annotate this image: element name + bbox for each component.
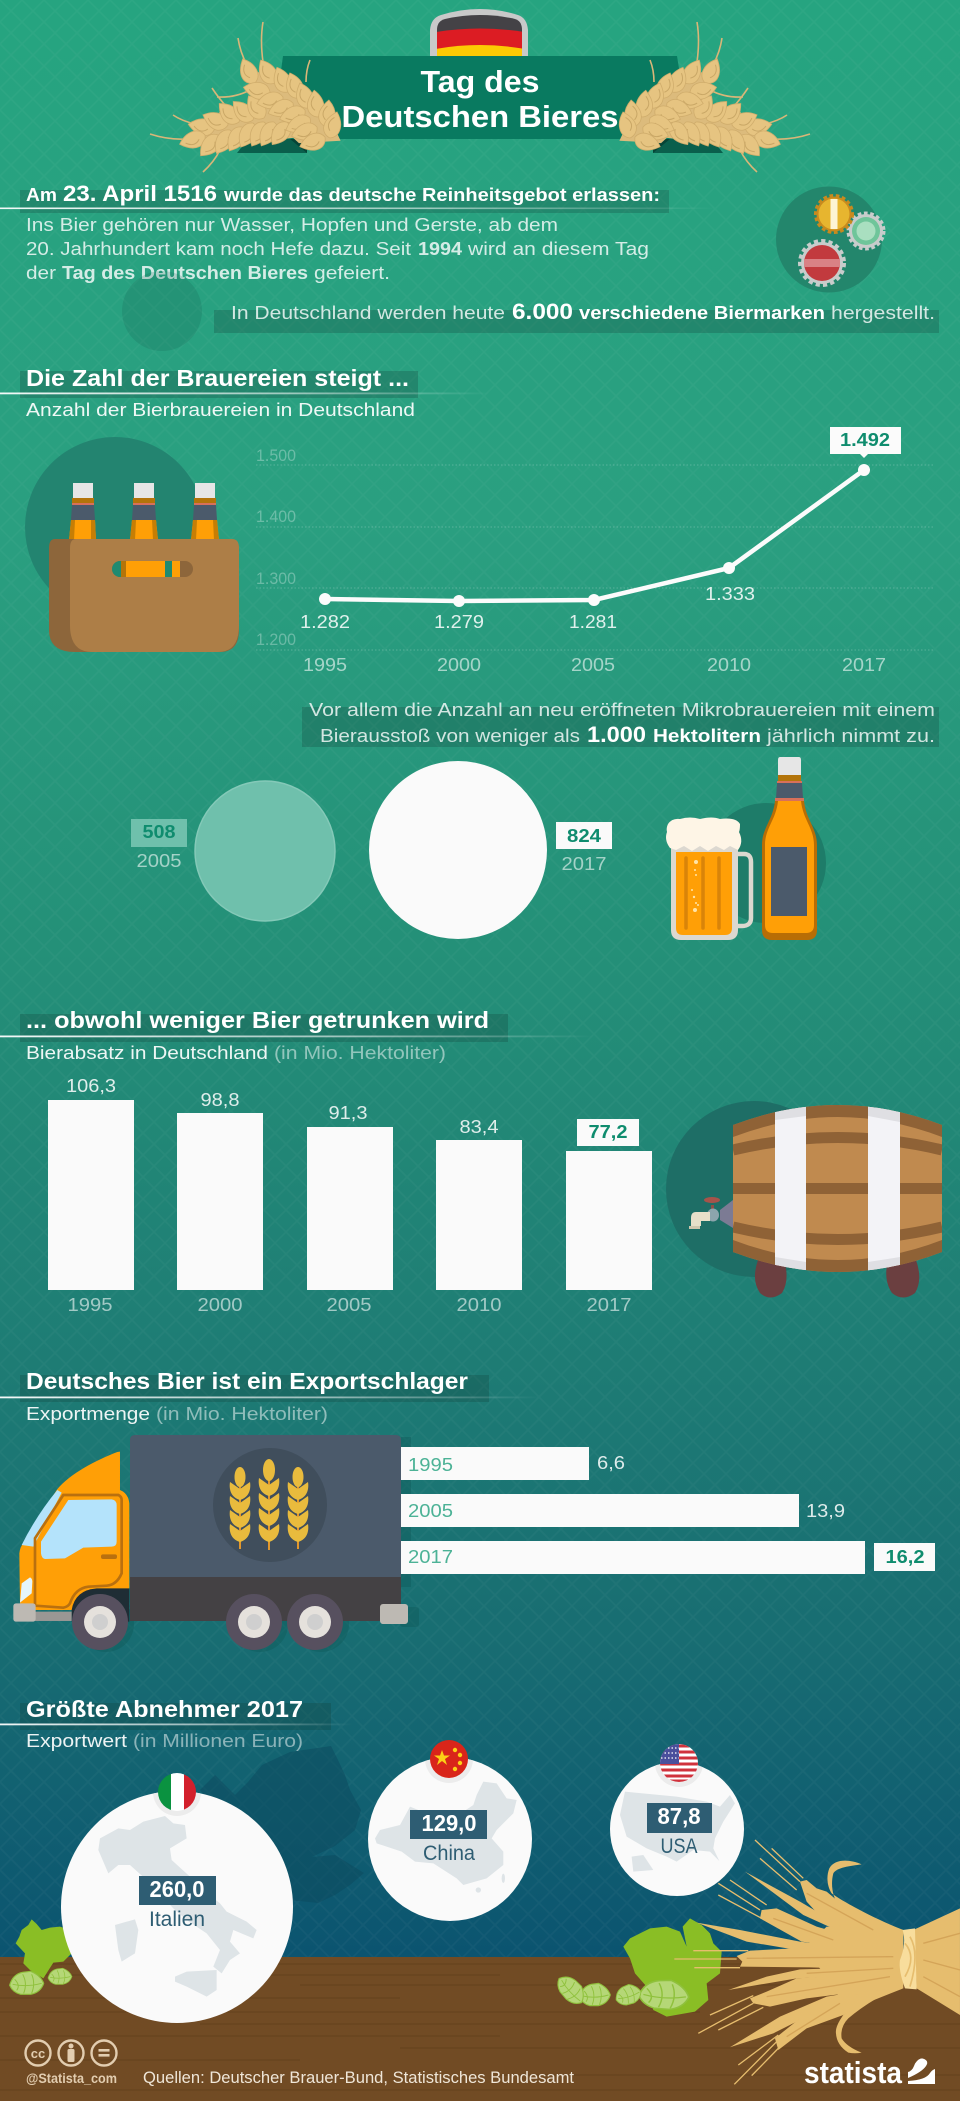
value: 87,8 [658, 1803, 701, 1829]
callout: Mikrobrauereien: Hektolitern [653, 725, 761, 746]
title text [342, 64, 618, 134]
bar 2017: 2017 [408, 1546, 453, 1567]
callout: Mikrobrauereien [302, 699, 939, 747]
intro text block: 1994 [418, 238, 463, 259]
years: 2010 [456, 1294, 502, 1315]
bar 1995: 1995 [408, 1454, 453, 1475]
subtitle: Bierabsatz: (in Mio. Hektoliter) [274, 1042, 446, 1063]
subtitle: Bierabsatz [26, 1042, 446, 1063]
beer bottle [762, 757, 817, 940]
x axis labels: 1995 [303, 654, 347, 675]
subtitle: Abnehmer [26, 1730, 303, 1751]
y axis labels: 1.400 [256, 507, 296, 526]
years: 2005 [326, 1294, 372, 1315]
y axis labels: 1.200 [256, 630, 296, 649]
bubble: USA: USA [660, 1835, 698, 1858]
background hop leaf silhouette [200, 1746, 364, 1903]
subtitle: Abnehmer: Exportwert [26, 1730, 127, 1751]
icon: bottle caps [776, 186, 883, 292]
intro heading [0, 181, 716, 213]
section heading: Bierabsatz [0, 1007, 594, 1042]
subtitle: Bierabsatz: Bierabsatz in Deutschland [26, 1042, 268, 1063]
crate [49, 539, 239, 652]
bubble: Italien: Italien [149, 1908, 205, 1931]
intro text block: 20. Jahrhundert kam noch Hefe dazu. Seit [26, 238, 411, 259]
map: China [375, 1782, 517, 1893]
y axis labels: 1.300 [256, 569, 296, 588]
wheels [72, 1594, 343, 1650]
x axis labels: 2017 [842, 654, 886, 675]
wooden table [0, 1957, 960, 2101]
values [597, 1452, 845, 1521]
data line [325, 470, 864, 601]
wheat emblem [213, 1448, 327, 1562]
banner ribbon [272, 56, 690, 139]
subtitle: Abnehmer: (in Millionen Euro) [133, 1730, 303, 1751]
bubble 2005 [131, 781, 335, 921]
beer mug [666, 818, 751, 940]
bubble: China: China [423, 1842, 475, 1865]
intro text block: gefeiert. [314, 262, 390, 283]
callout: 6.000 beer brands: 6.000 [512, 299, 573, 324]
sheaf body [697, 1861, 960, 2053]
bubble 2017: 2017 [562, 853, 606, 874]
title text: Deutschen Bieres [342, 99, 618, 134]
map: USA [620, 1792, 735, 1872]
bar chart: Exportmenge [401, 1447, 935, 1574]
years: 2017 [586, 1294, 632, 1315]
callout: 6.000 beer brands: In Deutschland werden heute [231, 302, 505, 323]
icon: beer mug and bottle [666, 757, 826, 940]
highlight label 16,2: 16,2 [886, 1546, 924, 1567]
bar chart: Bierabsatz [48, 1075, 652, 1315]
years: 2000 [198, 1294, 242, 1315]
value: 129,0 [422, 1810, 476, 1836]
y axis labels: 1.500 [256, 446, 296, 465]
statista handle: @Statista_com [26, 2071, 117, 2086]
section heading: Bierabsatz: ... obwohl weniger Bier getrunken wird [26, 1007, 489, 1033]
subtitle: Export: (in Mio. Hektoliter) [156, 1403, 328, 1424]
section heading: Brauereien [0, 365, 490, 398]
values: 91,3 [328, 1102, 368, 1123]
intro heading: Am [26, 185, 57, 205]
highlight label 16,2 [874, 1543, 935, 1571]
sheaf band [900, 1928, 917, 1989]
section heading: Abnehmer [0, 1696, 352, 1730]
tap [689, 1197, 733, 1229]
intro text block: wird an diesem Tag [467, 238, 649, 259]
bubble: China [368, 1735, 532, 1921]
green cap [849, 214, 883, 248]
line chart: Brauereien [256, 427, 934, 675]
wheat sheaf [674, 1840, 960, 2084]
x axis labels: 2000 [437, 654, 481, 675]
cab [13, 1452, 129, 1622]
values: 106,3 [66, 1075, 116, 1096]
highlight label 77,2: 77,2 [588, 1121, 628, 1142]
value: 260,0 [150, 1876, 204, 1902]
bubble: Italien [61, 1768, 293, 2023]
wheat ears right [616, 22, 810, 172]
bar 1995 [401, 1447, 589, 1480]
hop leaf and cones right [553, 1918, 722, 2017]
section heading: Export [0, 1368, 540, 1402]
icon: beer barrel [666, 1100, 943, 1298]
y axis labels [256, 446, 296, 649]
years [68, 1294, 632, 1315]
title text: Tag des [420, 64, 540, 99]
intro heading: 23. April 1516 [63, 181, 217, 206]
bar 2017 [401, 1541, 865, 1574]
flag: China [425, 1740, 473, 1783]
value [647, 1803, 712, 1833]
bars [48, 1100, 652, 1290]
data points [319, 464, 870, 607]
values: 13,9 [806, 1500, 845, 1521]
callout: Mikrobrauereien: Bierausstoß von weniger als [320, 725, 580, 746]
intro text block [26, 214, 649, 283]
section heading: Abnehmer: Größte Abnehmer 2017 [26, 1696, 303, 1722]
icon: bottle crate [25, 437, 239, 652]
gold cap [816, 196, 852, 232]
wheat ears left [150, 22, 344, 172]
flag: Italy [153, 1773, 201, 1816]
data labels: 1.282 [300, 611, 350, 632]
callout: Mikrobrauereien: 1.000 [587, 722, 646, 747]
data labels [300, 583, 755, 632]
data labels: 1.279 [434, 611, 484, 632]
section heading: Brauereien: Die Zahl der Brauereien steigt ... [26, 365, 409, 391]
values: 83,4 [460, 1116, 498, 1137]
highlight label 1.492 [830, 427, 901, 458]
banner tails [237, 139, 723, 153]
years: 1995 [68, 1294, 112, 1315]
values: 6,6 [597, 1452, 625, 1473]
stalk detail lines [747, 1893, 960, 2037]
bar 2005: 2005 [408, 1500, 453, 1521]
data labels: 1.281 [569, 611, 617, 632]
statista logo: statista [804, 2055, 903, 2090]
map: Italy [98, 1816, 257, 1997]
subtitle: Export [26, 1403, 328, 1424]
cargo box [130, 1435, 401, 1577]
bubble 2005: 2005 [136, 850, 182, 871]
callout: 6.000 beer brands [214, 299, 939, 333]
cc license icons [26, 2040, 116, 2066]
intro text block: der [26, 262, 56, 283]
flag: USA [655, 1744, 703, 1787]
intro text block: Tag des Deutschen Bieres [62, 262, 308, 283]
bubble 2005: 508 [142, 821, 176, 842]
staves and hoops [733, 1100, 943, 1280]
x axis labels [303, 654, 886, 675]
title banner [237, 8, 723, 153]
intro text block: Ins Bier gehören nur Wasser, Hopfen und Gerste, ab dem [26, 214, 558, 235]
subtitle: Export: Exportmenge [26, 1403, 150, 1424]
bubble 2017 [369, 761, 612, 939]
source line: Quellen: Deutscher Brauer-Bund, Statistisches Bundesamt [143, 2068, 574, 2087]
bar 2005 [401, 1494, 799, 1527]
hop plant left [10, 1919, 78, 1994]
awns [674, 1840, 803, 2084]
value [139, 1876, 216, 1905]
values [66, 1075, 498, 1137]
highlight label 1.492: 1.492 [840, 429, 890, 450]
x axis labels: 2005 [571, 654, 615, 675]
data labels: 1.333 [705, 583, 755, 604]
bubble 2017: 824 [567, 825, 602, 846]
truck shadow [78, 1437, 419, 1652]
x axis labels: 2010 [707, 654, 751, 675]
red cap [801, 242, 843, 284]
value [410, 1810, 487, 1839]
cc license icons: cc [31, 2046, 45, 2061]
bottles [69, 483, 219, 540]
highlight label 77,2 [577, 1119, 639, 1146]
german flag shield [430, 9, 528, 56]
callout: 6.000 beer brands: verschiedene Biermarken [579, 302, 825, 323]
values: 98,8 [200, 1089, 240, 1110]
intro heading: wurde das deutsche Reinheitsgebot erlassen: [223, 185, 660, 205]
callout: 6.000 beer brands: hergestellt. [831, 302, 935, 323]
bubble: USA [610, 1739, 744, 1896]
icon: delivery truck [13, 1435, 419, 1652]
callout: Mikrobrauereien: jährlich nimmt zu. [766, 725, 935, 746]
subtitle: Brauereien: Anzahl der Bierbrauereien in Deutschland [26, 399, 415, 420]
legs [755, 1260, 919, 1298]
section heading: Export: Deutsches Bier ist ein Exportschlager [26, 1368, 468, 1394]
callout: Mikrobrauereien: Vor allem die Anzahl an neu eröffneten Mikrobrauereien mit einem [309, 699, 935, 720]
icon: bottle cap silhouette [122, 271, 202, 351]
grid lines [256, 465, 934, 650]
